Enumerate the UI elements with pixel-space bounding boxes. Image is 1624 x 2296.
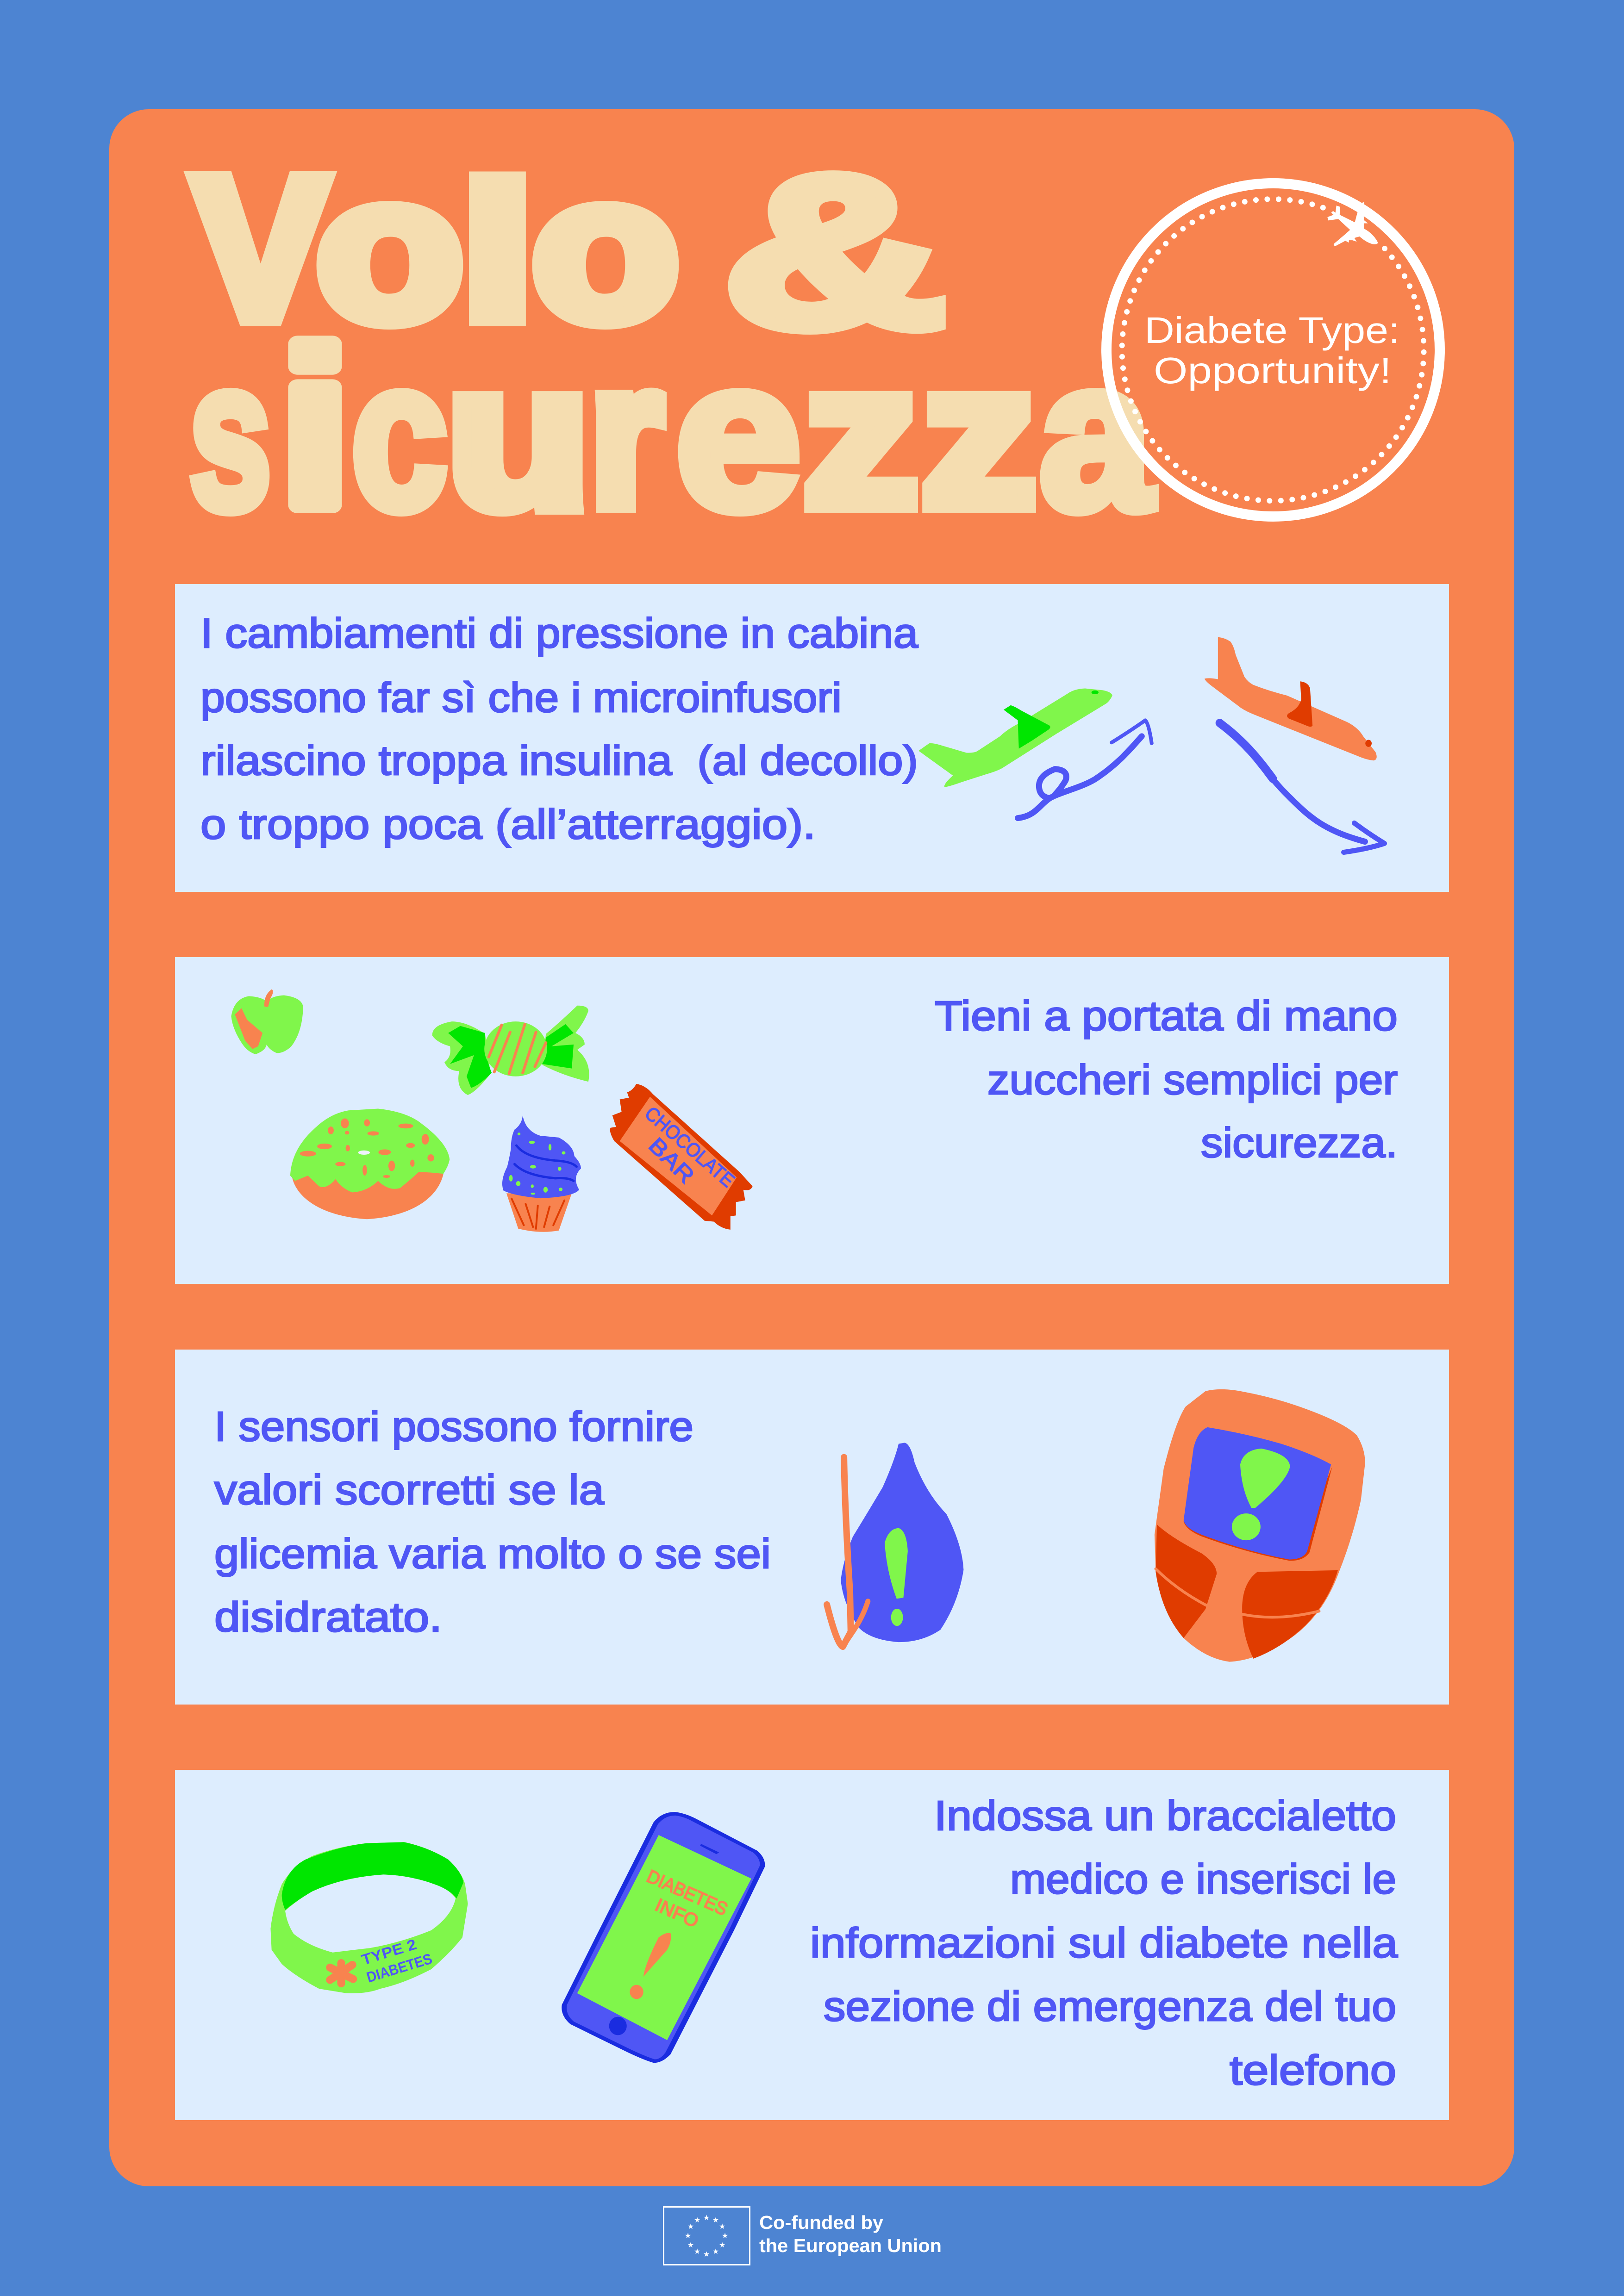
- panel: simple sugars: [175, 957, 1449, 1284]
- EU flag: ★: [687, 2222, 694, 2231]
- text: cabin pressure: I cambiamenti di pressione in cabina: [200, 610, 918, 657]
- text: simple sugars: sicurezza.: [1201, 1120, 1398, 1166]
- title: Volo & sicurezza: [189, 131, 1153, 554]
- EU text: Co-funded by: [759, 2212, 883, 2233]
- title: Volo & sicurezza: r: [591, 323, 662, 548]
- icon: candy: [432, 1006, 589, 1095]
- icon: orange plane landing: [1205, 637, 1377, 760]
- chocolate bar label: CHOCOLATE: [641, 1102, 739, 1191]
- title: Volo & sicurezza: e: [675, 316, 801, 554]
- icon: planes and arrows: [918, 637, 1385, 852]
- icon: cupcake: [502, 1115, 581, 1232]
- EU flag: ★: [722, 2231, 728, 2240]
- icon: sweets: [231, 989, 753, 1232]
- EU flag: ★: [685, 2231, 691, 2240]
- bracelet label: TYPE 2: [360, 1936, 418, 1968]
- text: sensors: valori scorretti se la: [214, 1467, 605, 1513]
- text: bracelet and phone: informazioni sul diabete nella: [810, 1920, 1398, 1966]
- stamp text: Opportunity!: [1154, 350, 1392, 391]
- EU flag: [664, 2207, 750, 2265]
- title: Volo & sicurezza: i: [280, 304, 350, 553]
- bracelet label: [360, 1936, 434, 1986]
- text: cabin pressure: possono far sì che i microinfusori: [200, 675, 842, 721]
- text: simple sugars: zuccheri semplici per: [987, 1057, 1398, 1103]
- text: cabin pressure: rilascino troppa insulina (al decollo): [200, 738, 918, 784]
- icon: bracelet and phone: [270, 1812, 765, 2063]
- icon: donut: [290, 1108, 450, 1219]
- EU flag: ★: [719, 2222, 725, 2231]
- text: sensors: I sensori possono fornire: [214, 1404, 693, 1450]
- text: bracelet and phone: medico e inserisci le: [1010, 1856, 1396, 1903]
- arrow: orange down: [827, 1457, 868, 1647]
- title: Volo & sicurezza: z: [923, 324, 1035, 548]
- EU flag: ★: [703, 2250, 710, 2259]
- EU flag: ★: [703, 2213, 710, 2222]
- icon: stamp airplane: [1327, 202, 1378, 246]
- icon: medical bracelet: [270, 1842, 468, 1993]
- arrow: down: [1219, 722, 1385, 852]
- text: cabin pressure: o troppo poca (all’atterraggio).: [200, 802, 816, 848]
- icon: drop and glucose meter: [827, 1389, 1365, 1662]
- EU flag: ★: [694, 2247, 700, 2256]
- stamp: Diabete Type: Opportunity!: [1106, 183, 1440, 516]
- title: Volo & sicurezza: s: [189, 316, 271, 554]
- text: sensors: [214, 1404, 771, 1641]
- text: cabin pressure: [200, 610, 918, 848]
- phone label: DIABETES: [643, 1866, 731, 1920]
- panel: bracelet and phone: [175, 1770, 1449, 2120]
- EU flag: ★: [687, 2240, 694, 2249]
- panel: cabin pressure: [175, 584, 1449, 892]
- panel: sensors: [175, 1350, 1449, 1705]
- arrow: up with loop: [1018, 720, 1152, 818]
- EU text: the European Union: [759, 2235, 942, 2256]
- title: Volo & sicurezza: o: [317, 134, 462, 363]
- text: bracelet and phone: Indossa un braccialetto: [934, 1793, 1396, 1839]
- panel: orange card: [109, 109, 1514, 2186]
- icon: blood drop with exclamation: [841, 1443, 963, 1642]
- text: bracelet and phone: [810, 1793, 1398, 2094]
- stamp text: [1144, 310, 1400, 391]
- icon: green plane taking off: [918, 689, 1112, 787]
- bracelet label: DIABETES: [365, 1950, 434, 1986]
- title: Volo & sicurezza: a: [1040, 316, 1153, 554]
- text: sensors: glicemia varia molto o se sei: [214, 1531, 771, 1577]
- EU flag: ★: [712, 2247, 719, 2256]
- title: Volo & sicurezza: V: [194, 136, 328, 361]
- title: Volo & sicurezza: z: [805, 324, 917, 548]
- icon: glucose meter: [1155, 1389, 1365, 1662]
- stamp text: Diabete Type:: [1144, 310, 1400, 351]
- text: simple sugars: Tieni a portata di mano: [935, 993, 1398, 1039]
- EU flag: ★: [719, 2240, 725, 2249]
- icon: apple: [231, 989, 303, 1054]
- icon: smartphone: [562, 1812, 765, 2063]
- title: Volo & sicurezza: &: [724, 131, 946, 372]
- title: Volo & sicurezza: c: [351, 316, 448, 554]
- phone label: INFO: [652, 1895, 702, 1932]
- EU flag: ★: [694, 2215, 700, 2224]
- text: simple sugars: [935, 993, 1398, 1166]
- icon: chocolate bar wrapper: [610, 1084, 753, 1230]
- chocolate bar label: BAR: [643, 1133, 699, 1188]
- EU text: [759, 2212, 942, 2256]
- title: Volo & sicurezza: l: [462, 145, 533, 359]
- text: sensors: disidratato.: [214, 1594, 442, 1641]
- logo: EU co-funded: [664, 2207, 942, 2265]
- title: Volo & sicurezza: o: [532, 134, 678, 363]
- text: bracelet and phone: sezione di emergenza del tuo: [824, 1984, 1396, 2030]
- title: Volo & sicurezza: u: [448, 324, 589, 549]
- text: bracelet and phone: telefono: [1230, 2047, 1396, 2094]
- EU flag: ★: [712, 2215, 719, 2224]
